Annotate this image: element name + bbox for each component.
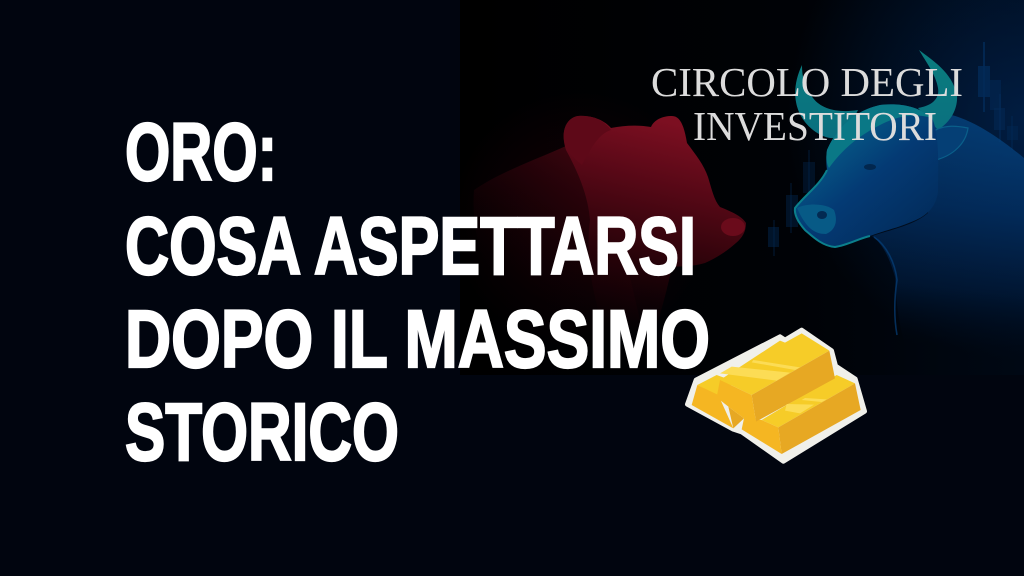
top bar [720,333,829,395]
bull nostril [817,211,827,219]
lower bar [762,375,855,427]
background photo: bear and bull [460,0,1024,375]
bull head [795,104,938,247]
bear head [564,116,746,330]
blue glow [784,0,1024,375]
title line 3: DOPO IL MASSIMO [125,294,710,385]
bull [795,50,1024,345]
photo panel [460,0,1024,375]
brand line 1: CIRCOLO DEGLI [651,59,963,105]
bull snout and jaw outline [795,170,870,247]
bear [473,116,746,330]
title line 2: COSA ASPETTARSI [125,201,696,292]
bull neck and shoulder [872,112,1024,345]
bear snout [721,218,745,236]
bull eye [864,164,876,170]
sticker outline [687,330,865,461]
brand line 2: INVESTITORI [693,103,937,149]
bear ear [564,116,611,165]
red glow [460,90,710,350]
main title [125,107,710,478]
left bar [697,375,735,396]
candlestick chart [768,42,1018,256]
bear body [473,146,640,320]
bull muzzle [797,204,836,234]
icon: gold bars [687,330,865,461]
bull neck outline [874,237,897,335]
title line 4: STORICO [125,387,399,478]
bull forehead highlight [826,104,932,168]
bull ear [927,126,968,161]
brand name: Circolo degli Investitori [651,59,963,149]
bull horns [795,50,957,138]
title line 1: ORO: [125,107,277,198]
highlights [720,367,790,381]
